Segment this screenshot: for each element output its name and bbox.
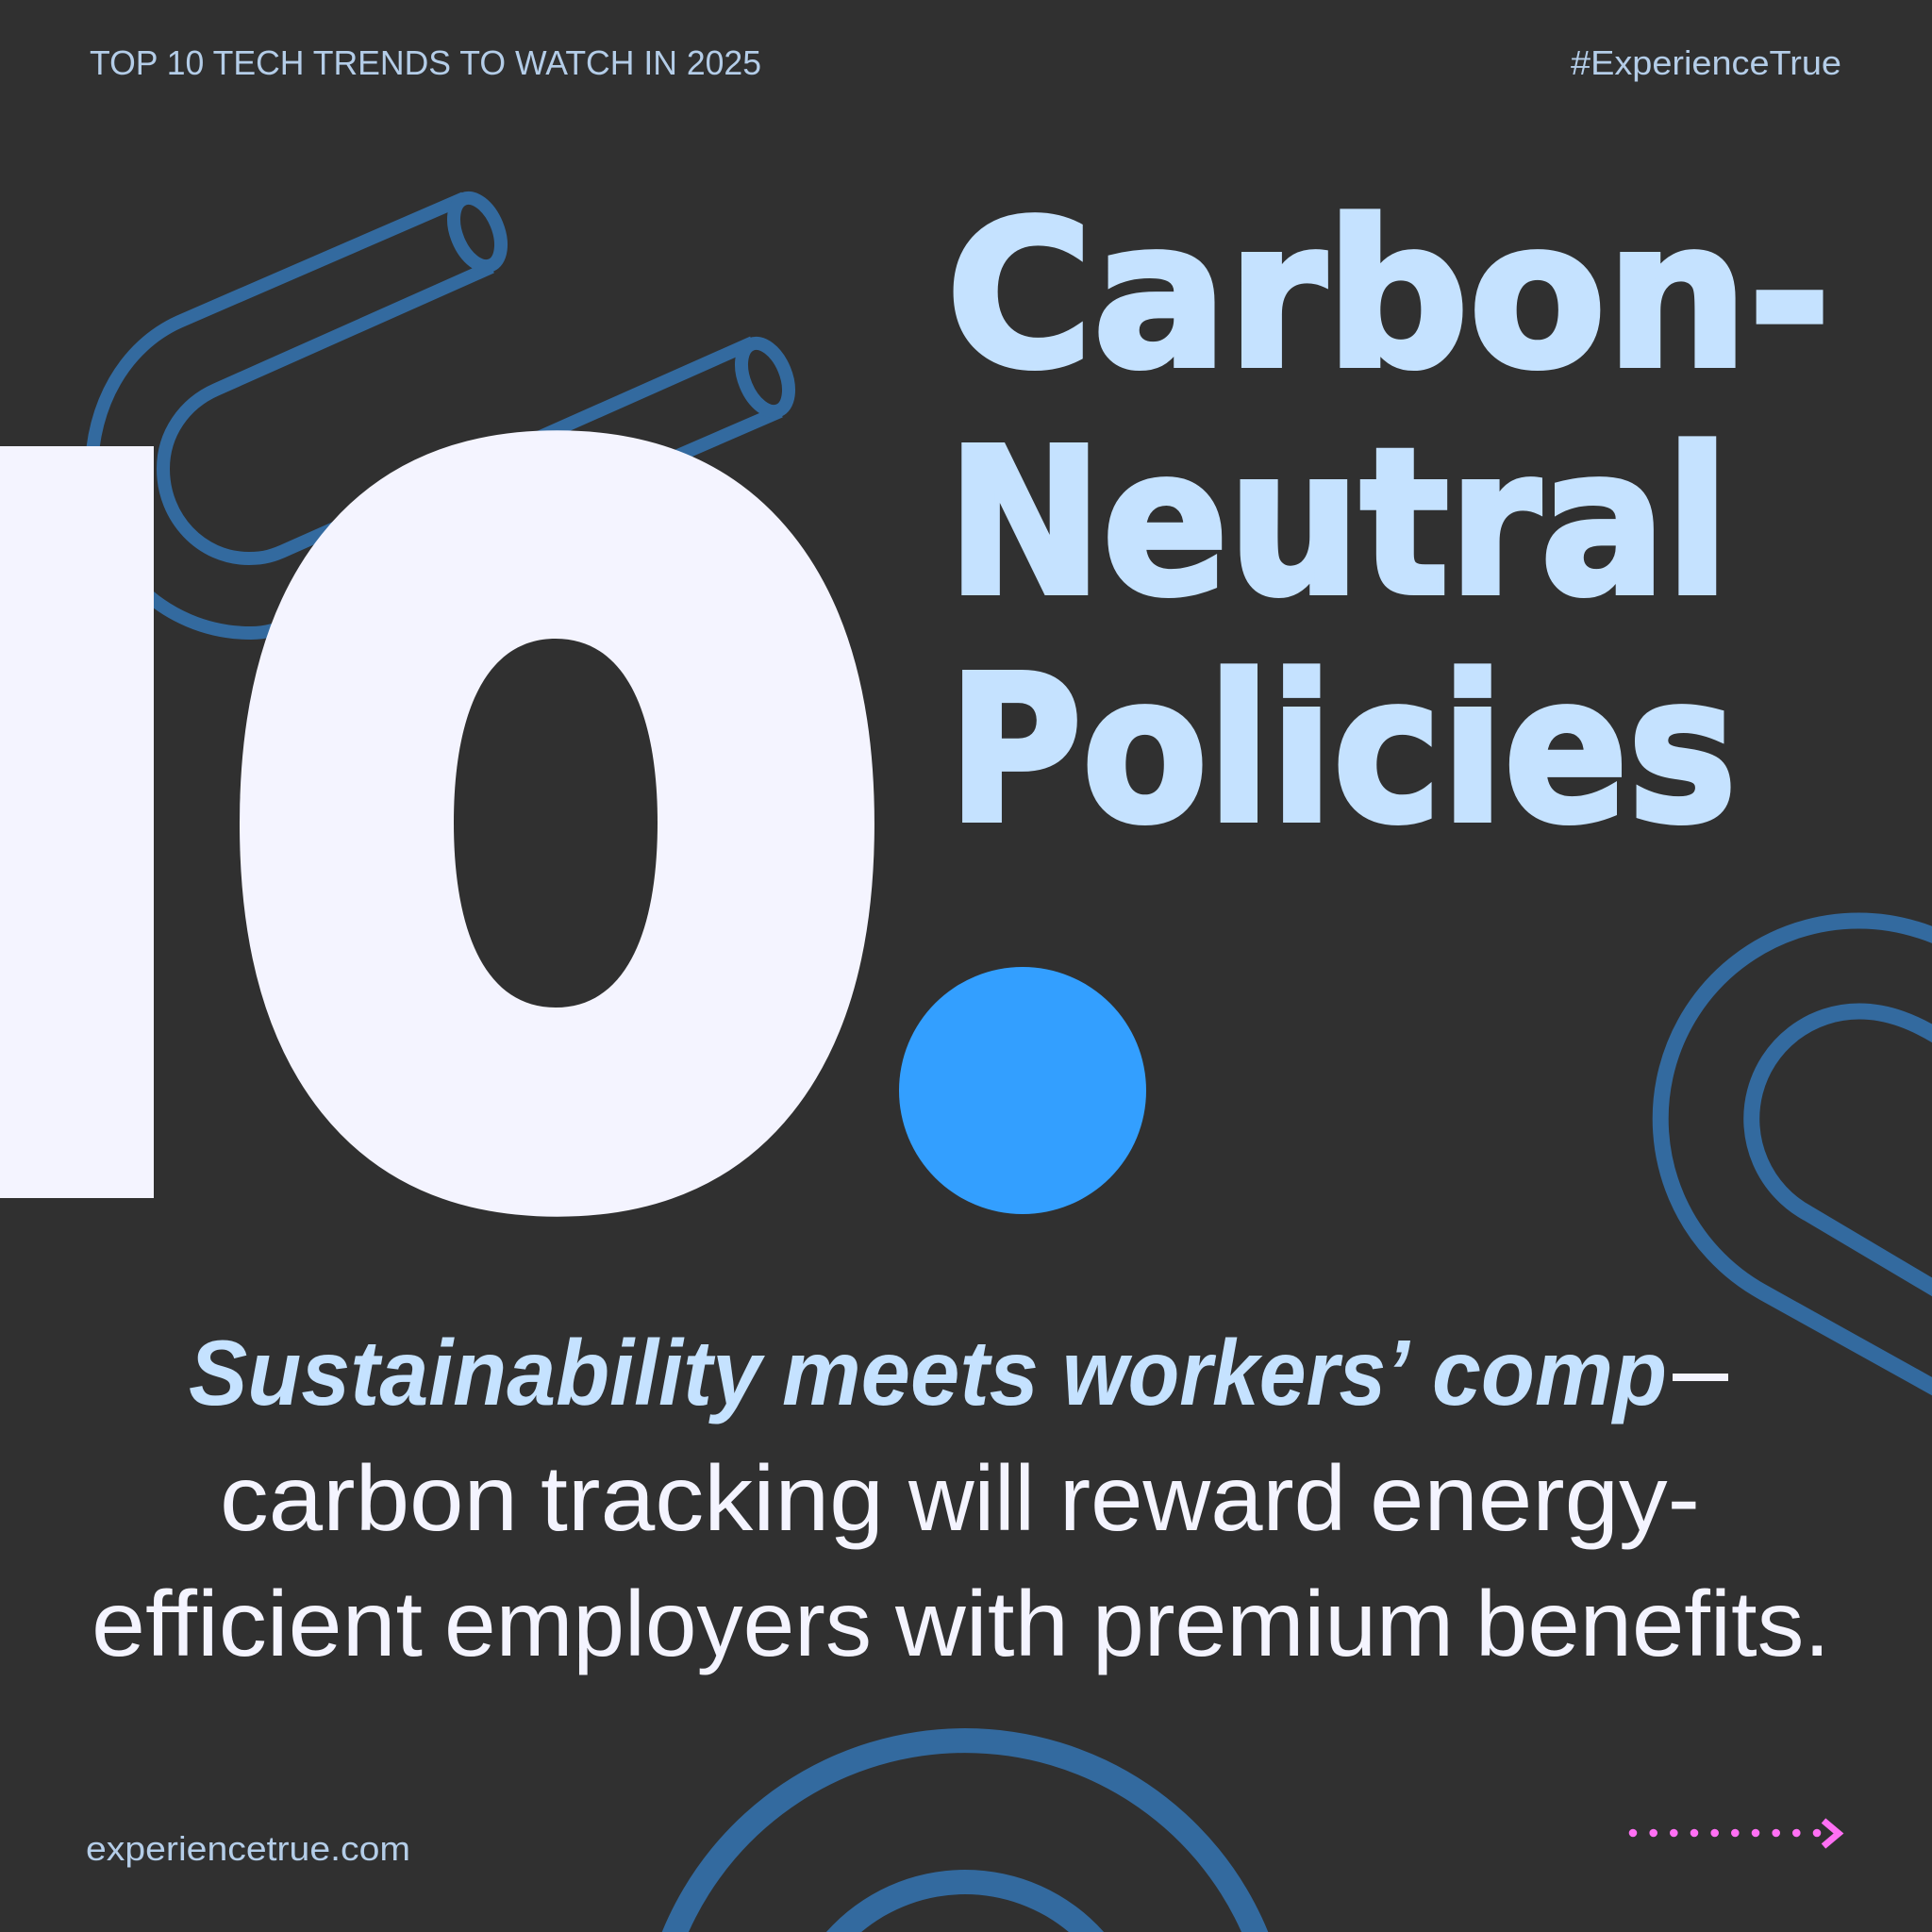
body statement: [92, 1321, 1830, 1675]
heading: Policies: [948, 633, 1737, 868]
line two: reward: [1059, 1446, 1346, 1550]
digit 0: 0: [207, 259, 908, 1424]
arrow: dotted next: [1629, 1821, 1839, 1846]
line three: with: [894, 1572, 1069, 1675]
line two: energy-: [1370, 1446, 1700, 1550]
emphasised lead: meets: [782, 1321, 1039, 1424]
decorative tube: right: [1660, 921, 1932, 1391]
line three: employers: [444, 1572, 872, 1675]
line two: will: [908, 1446, 1035, 1550]
line three: benefits.: [1475, 1572, 1830, 1675]
emphasised lead: workers’: [1062, 1321, 1411, 1424]
header series label: TOP 10 TECH TRENDS TO WATCH IN 2025: [90, 43, 761, 82]
emphasised lead: Sustainability: [189, 1321, 765, 1424]
decorative tube: top left: [92, 191, 798, 633]
heading: [946, 178, 1831, 868]
line three: efficient: [92, 1572, 423, 1675]
big number 10: [0, 236, 908, 1443]
line two: carbon: [220, 1446, 518, 1550]
header hashtag: #ExperienceTrue: [1571, 43, 1841, 82]
em dash: [1673, 1374, 1728, 1381]
footer website: experiencetrue.com: [86, 1829, 410, 1868]
line two: [220, 1446, 1700, 1550]
blue dot: [899, 967, 1146, 1214]
emphasised lead: comp: [1432, 1321, 1667, 1424]
decorative arcs: bottom centre: [662, 1728, 1268, 1932]
heading: Neutral: [947, 406, 1729, 641]
line three: premium: [1092, 1572, 1454, 1675]
heading: Carbon-: [946, 178, 1831, 413]
line two: tracking: [541, 1446, 884, 1550]
digit 1: [0, 446, 154, 1198]
emphasised lead: [189, 1321, 1667, 1424]
line three: [92, 1572, 1830, 1675]
